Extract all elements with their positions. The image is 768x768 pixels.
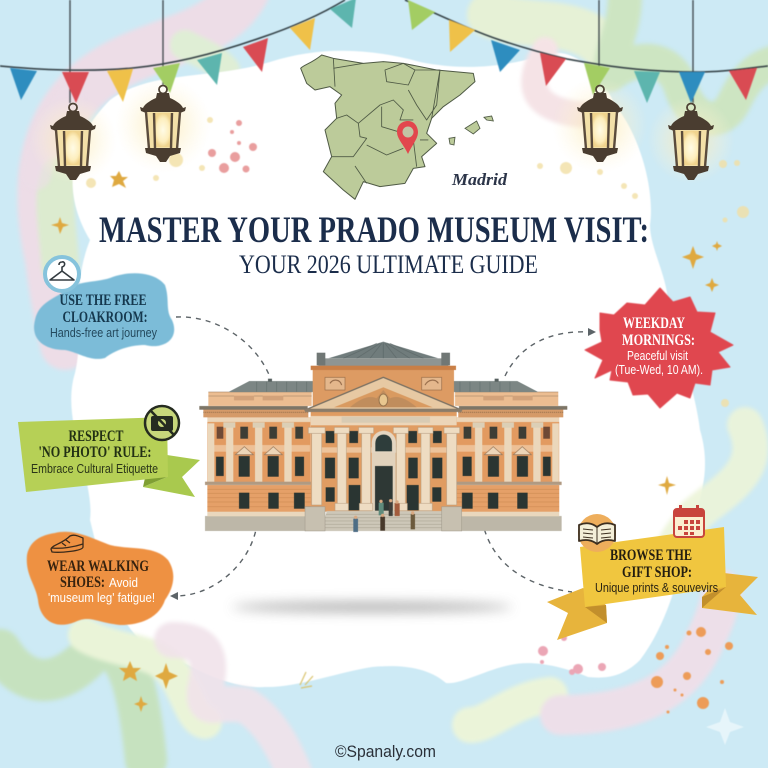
lantern 1: [50, 104, 96, 180]
callout heading: MORNINGS:: [622, 332, 695, 349]
bunting right: [405, 0, 768, 103]
callout: no photo rule: [18, 406, 200, 497]
icon: no camera: [145, 406, 179, 440]
central door and arched window: [372, 431, 396, 512]
callout heading: SHOES:: [60, 574, 105, 591]
callout heading: WEEKDAY: [623, 315, 685, 332]
callout heading: BROWSE THE: [610, 547, 692, 564]
Prado museum building: [199, 342, 567, 532]
left ribbon tail: [547, 588, 607, 640]
decorative confetti dots: [86, 117, 749, 714]
callout text: Avoid: [109, 575, 138, 590]
central columns: [308, 427, 460, 511]
callout: walking shoes: [27, 532, 173, 625]
star decorations: [51, 171, 744, 745]
right ribbon tail: [702, 573, 758, 615]
central windows: [325, 431, 442, 510]
callout heading: CLOAKROOM:: [62, 309, 148, 326]
lantern glows: [29, 77, 735, 184]
callout text: Hands-free art journey: [50, 325, 157, 340]
callout: gift shop: [547, 505, 758, 640]
callout heading: 'NO PHOTO' RULE:: [38, 444, 152, 461]
arrow: museum to gift shop: [482, 520, 572, 592]
callout: free cloakroom: [34, 257, 174, 359]
icon: map pin: [397, 121, 418, 154]
cloud shape: [34, 273, 174, 359]
callout: weekday mornings: [585, 288, 733, 408]
lantern 4: [668, 104, 714, 180]
white central area: [71, 51, 705, 687]
icon: open book: [578, 514, 616, 552]
icon: coat hanger: [45, 257, 79, 291]
bunting left: [0, 0, 356, 103]
starburst shape: [585, 288, 733, 408]
map of Spain: [301, 55, 493, 199]
ribbon tail: [143, 455, 200, 497]
lantern 3: [577, 86, 623, 162]
arrow: museum to weekday mornings: [505, 328, 596, 376]
central block: [305, 342, 462, 512]
visitors on the steps: [353, 499, 415, 532]
callout text: Peaceful visit: [627, 348, 688, 363]
subtitle: YOUR 2026 ULTIMATE GUIDE: [239, 250, 538, 279]
callout text: Embrace Cultural Etiquette: [31, 461, 158, 476]
museum ground shadow: [232, 602, 512, 612]
callout text: Unique prints & souvevirs: [595, 580, 718, 595]
entrance stairs: [305, 507, 462, 531]
callout heading: WEAR WALKING: [47, 558, 149, 575]
copyright: ©Spanaly.com: [335, 742, 436, 761]
icon: calendar: [674, 505, 704, 537]
ribbon banner: [18, 417, 168, 492]
icon: walking shoe: [51, 535, 83, 552]
arrow: museum to walking shoes: [170, 512, 258, 600]
blob shape: [27, 532, 173, 625]
callout text: 'museum leg' fatigue!: [48, 590, 155, 605]
callout heading: RESPECT: [68, 428, 124, 445]
ribbon banner: [580, 527, 726, 607]
callout text: (Tue-Wed, 10 AM).: [615, 362, 703, 377]
callout heading: GIFT SHOP:: [622, 564, 692, 581]
lantern 2: [140, 86, 186, 162]
callout heading: USE THE FREE: [60, 292, 146, 309]
map label: Madrid: Madrid: [451, 170, 508, 189]
arrow: cloakroom to museum: [176, 317, 270, 377]
